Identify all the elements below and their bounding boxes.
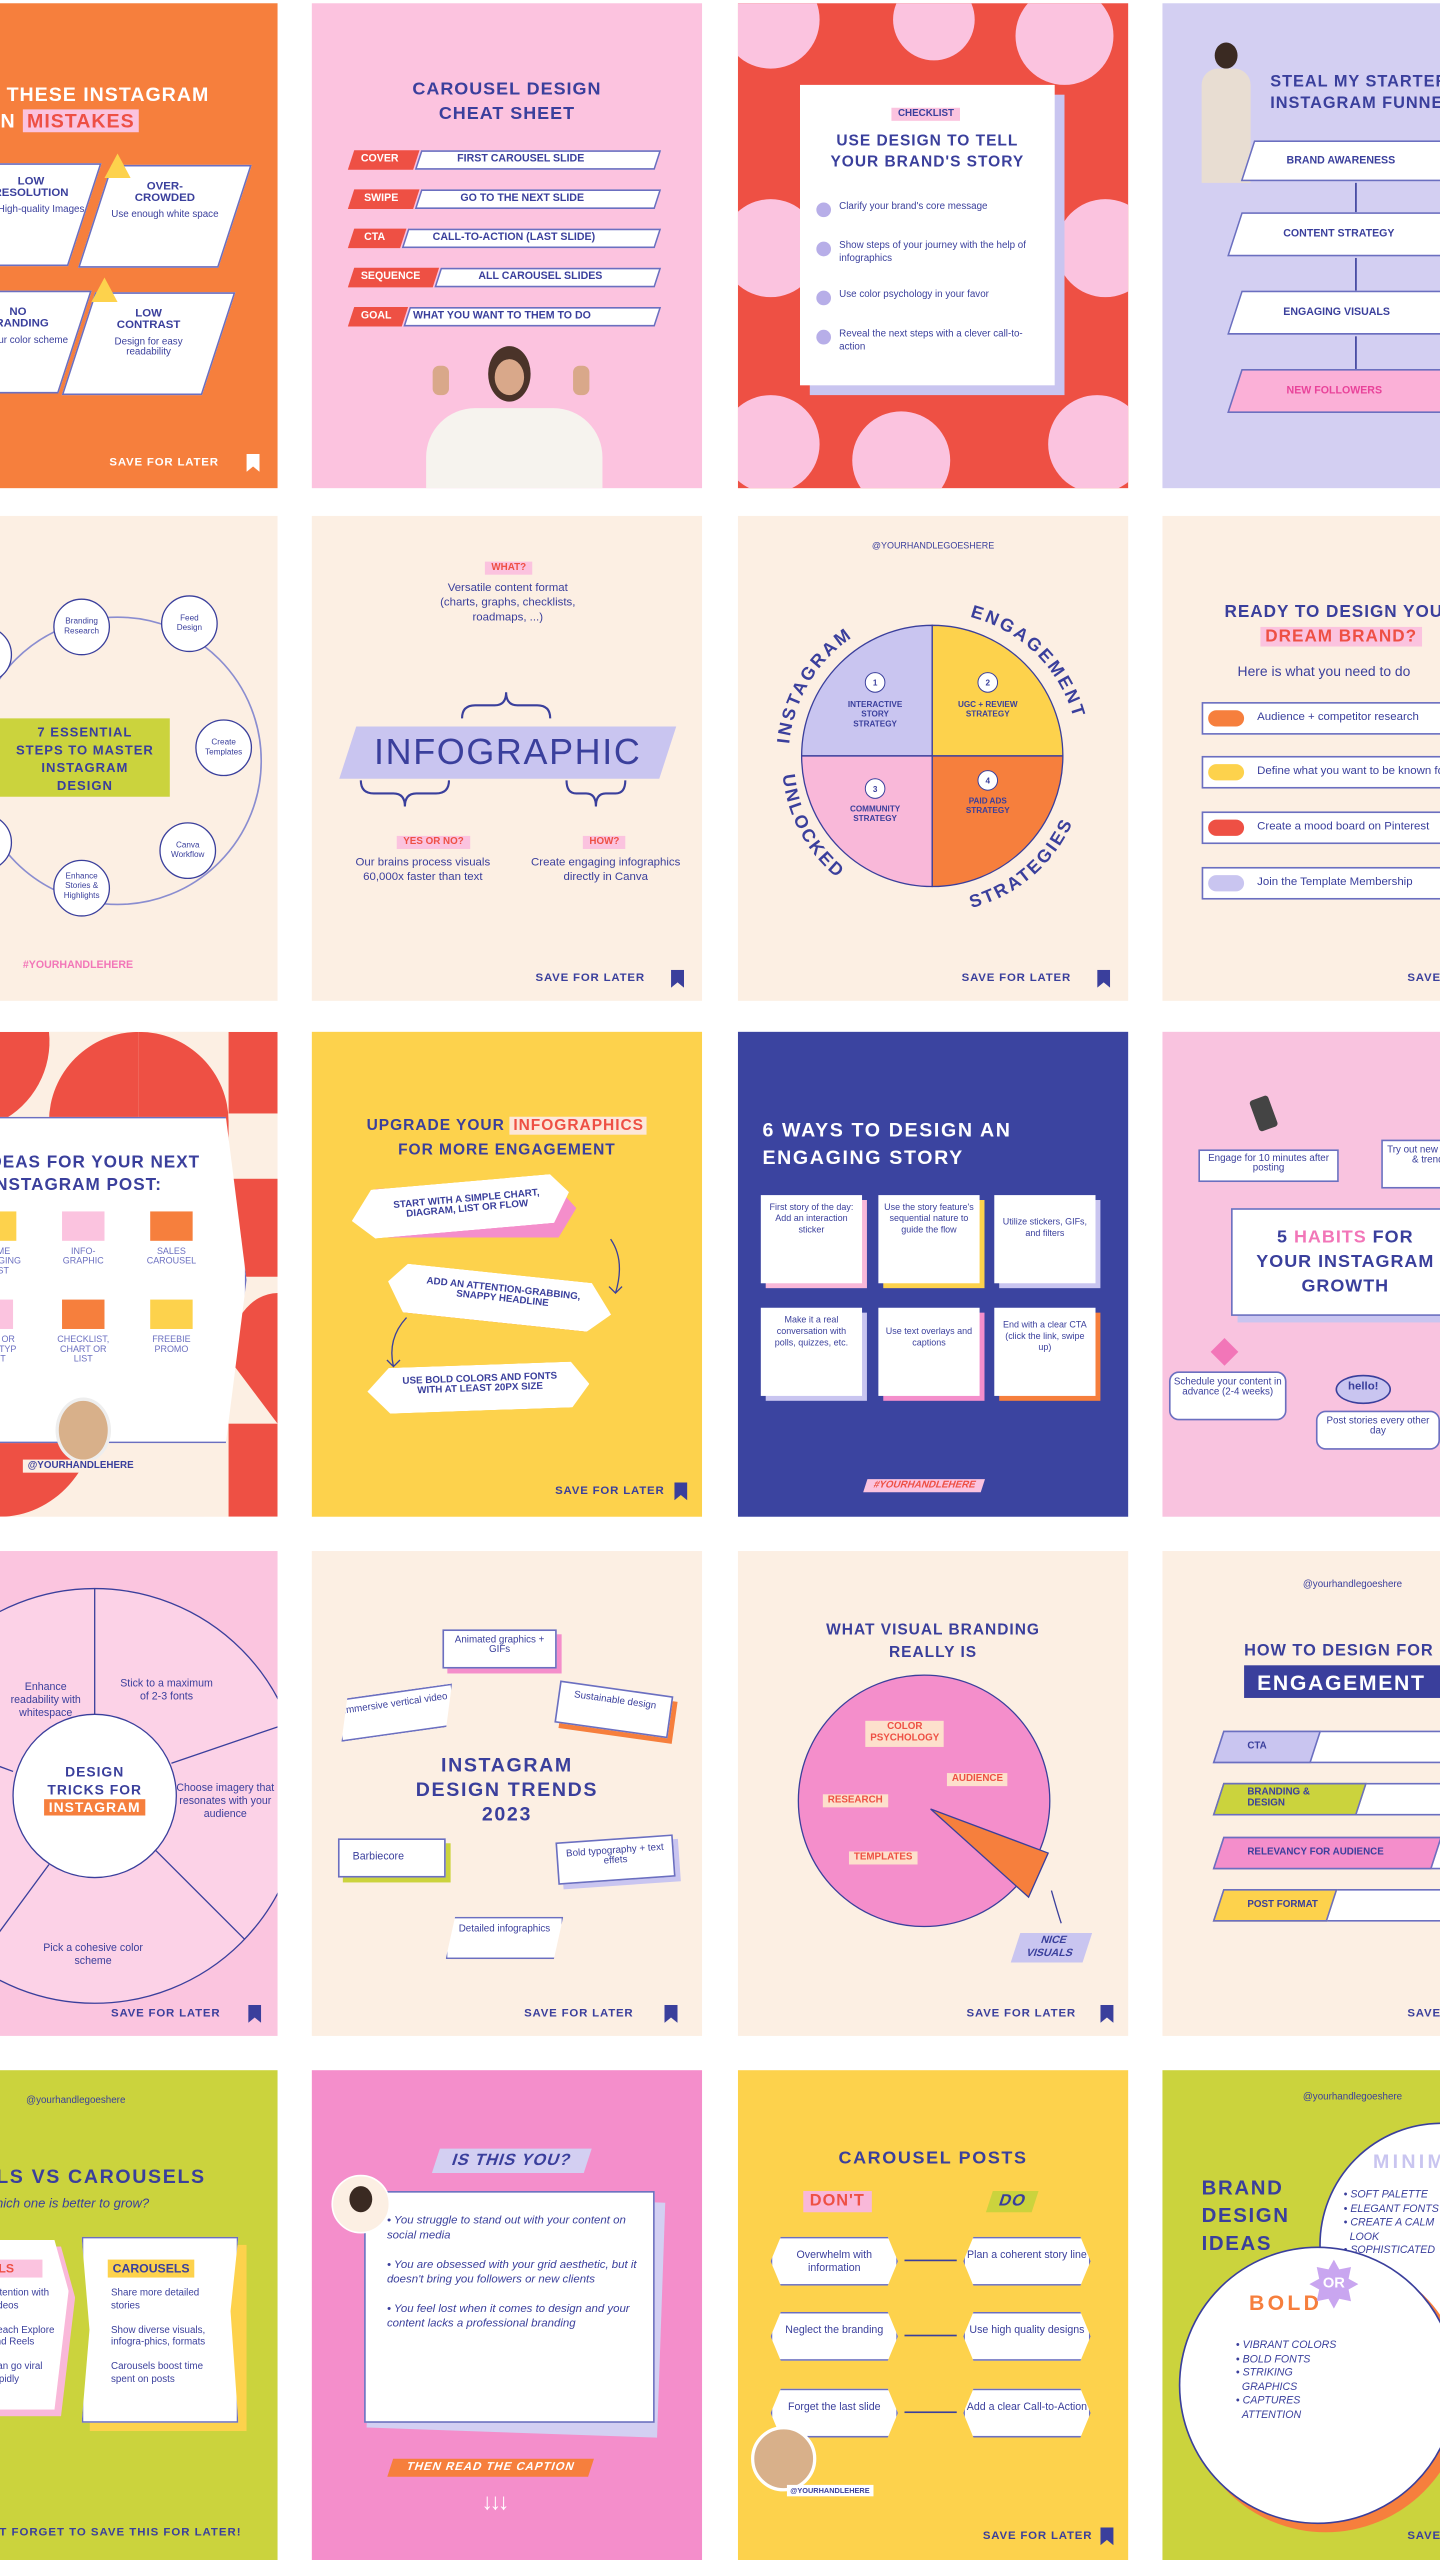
title: 6 WAYS TO DESIGN AN	[762, 1118, 1012, 1141]
handle: @yourhandlegoeshere	[1303, 1580, 1402, 1590]
wheel: PAID ADS	[969, 796, 1007, 805]
center label: INSTAGRAM	[41, 761, 128, 776]
folder icons: FREEBIE	[152, 1336, 191, 1345]
todo rows: Create a mood board on Pinterest	[1257, 821, 1429, 833]
wheel: 4	[985, 777, 990, 786]
arrows: ↓↓↓	[482, 2488, 506, 2514]
habit: schedule: Schedule your content in advance (2-4 weeks)	[1174, 1378, 1282, 1398]
wheel: STORY	[861, 710, 889, 719]
card: reels	[0, 2240, 75, 2416]
handle tag: @YOURHANDLEHERE	[28, 1461, 134, 1471]
title	[412, 80, 601, 124]
text: yes or no: Our brains process visuals 60,000x faster than text	[356, 857, 490, 883]
icon: bookmark	[1100, 2005, 1113, 2023]
tile 17: reels vs carousels	[0, 2070, 278, 2560]
tag: what	[485, 562, 533, 575]
title: DESIGN	[1202, 2204, 1290, 2227]
bullets	[387, 2216, 637, 2330]
tile 15: visual branding	[738, 1551, 1128, 2036]
cycle diagram: Canva	[176, 840, 200, 849]
cheat rows: SEQUENCE	[361, 271, 420, 282]
card: overcrowded: CROWDED	[135, 193, 195, 204]
wheel: STRATEGY	[966, 710, 1010, 719]
title: HOW TO DESIGN FOR	[1244, 1642, 1434, 1660]
funnel steps	[1227, 140, 1440, 413]
icon: hello bubble	[1336, 1375, 1391, 1404]
wheel: STRATEGIES	[970, 820, 1071, 907]
handle tag: #YOURHANDLEHERE	[872, 1481, 977, 1491]
cycle diagram: Feed	[180, 613, 199, 622]
cheat rows: ALL CAROUSEL SLIDES	[478, 271, 602, 282]
title: DREAM BRAND?	[1265, 627, 1417, 647]
title: 2023	[482, 1802, 532, 1825]
badge: or: OR	[1323, 2274, 1345, 2291]
circle: bold	[1179, 2247, 1440, 2524]
card: low contrast: Design for easy	[115, 338, 183, 348]
handle tag	[23, 1460, 139, 1473]
circle: minimal: • SOPHISTICATED	[1344, 2245, 1435, 2256]
cycle diagram: Branding	[65, 617, 98, 626]
card: no branding: NO	[9, 307, 27, 318]
card: carousels: CAROUSELS	[113, 2261, 190, 2276]
todo rows	[1202, 702, 1440, 900]
wheel: INTERACTIVE	[848, 700, 903, 709]
icon: hello bubble: hello!	[1348, 1381, 1378, 1393]
card: carousels: Carousels boost time spent on posts	[111, 2362, 203, 2384]
center box: YOUR INSTAGRAM	[1256, 1252, 1434, 1272]
story cards: Use the story feature's sequential nature to guide the flow	[884, 1203, 974, 1236]
bullets: • You struggle to stand out with your content on social media	[387, 2216, 626, 2242]
wheel: STRATEGY	[853, 814, 898, 823]
funnel steps: NEW FOLLOWERS	[1287, 385, 1382, 397]
folder icons: CAROUSEL	[147, 1257, 196, 1267]
folder icons: CHECKLIST,	[57, 1336, 109, 1345]
folder icons: CHART OR	[60, 1345, 107, 1355]
cheat rows: GO TO THE NEXT SLIDE	[460, 193, 584, 204]
items: Show steps of your journey with the help of infographics	[839, 242, 1026, 264]
icon: warning	[104, 153, 131, 178]
cycle diagram: Workflow	[171, 850, 205, 859]
wheel: INSTAGRAM	[777, 628, 851, 743]
bullets: • You feel lost when it comes to design and your content lacks a professional branding	[387, 2304, 630, 2330]
cycle diagram: Design	[177, 623, 202, 632]
handle: #YOURHANDLEHERE	[23, 960, 133, 971]
text: what: roadmaps, ...)	[472, 612, 543, 624]
tile 14: trends 2023	[312, 1551, 702, 2036]
handle	[787, 2485, 873, 2496]
tile 13: design tricks pie: Pick a cohesive color scheme	[43, 1943, 143, 1967]
bars: POST FORMAT	[1247, 1900, 1318, 1910]
tile 2: carousel cheat sheet	[312, 3, 702, 488]
photo: avatar	[751, 2426, 816, 2491]
story cards: Utilize stickers, GIFs, and filters	[1003, 1218, 1087, 1239]
photo: avatar	[331, 2175, 390, 2233]
photo: avatar	[56, 1398, 111, 1463]
step arrows: USE BOLD COLORS AND FONTS WITH AT LEAST 20PX SIZE	[402, 1372, 557, 1396]
center label	[0, 718, 170, 797]
wheel	[777, 605, 1086, 907]
icon: bookmark	[1100, 2527, 1113, 2545]
hex rows: Use high quality designs	[969, 2325, 1084, 2336]
card: overcrowded	[78, 164, 252, 268]
circle: bold: GRAPHICS	[1242, 2381, 1297, 2393]
hex rows: Overwhelm with information	[797, 2250, 872, 2274]
handle: @yourhandlegoeshere	[26, 2096, 125, 2106]
tag: yes or no	[397, 836, 470, 849]
save: SAVE FOR LATER	[111, 2008, 220, 2020]
card: overcrowded: Use enough white space	[111, 211, 219, 220]
title	[0, 83, 209, 132]
center box: 5 HABITS FOR	[1277, 1228, 1414, 1247]
save: SAVE FOR LATER	[524, 2008, 634, 2020]
wheel: STRATEGY	[966, 806, 1010, 815]
cycle diagram: Enhance	[66, 871, 98, 880]
tile 9: ideas for next post	[0, 1032, 278, 1517]
story cards: Use text overlays and captions	[886, 1327, 972, 1349]
center label: DESIGN	[57, 779, 113, 793]
title	[1270, 73, 1440, 113]
bars: CTA	[1247, 1742, 1267, 1752]
tag: nice visuals	[1011, 1933, 1092, 1962]
tile 12: 5 habits	[1162, 1032, 1440, 1517]
story cards: End with a clear CTA (click the link, swipe up)	[1003, 1321, 1087, 1353]
center title	[44, 1763, 146, 1816]
handle: @yourhandlegoeshere	[1303, 2093, 1402, 2103]
bars: DESIGN	[1247, 1799, 1285, 1809]
tile 10: upgrade infographics	[312, 1032, 702, 1517]
subtitle: Here is what you need to do	[1238, 663, 1410, 679]
title	[367, 1116, 647, 1159]
tile 15: visual branding: TEMPLATES	[854, 1853, 912, 1863]
items: Use color psychology in your favor	[839, 291, 989, 300]
tag: how	[583, 836, 626, 849]
circle: bold: • VIBRANT COLORS	[1236, 2340, 1336, 2351]
card title: USE DESIGN TO TELL	[836, 132, 1018, 150]
tile 1: avoid mistakes	[0, 3, 278, 488]
tile 3: checklist brand story	[738, 3, 1128, 488]
save: SAVE FOR LATER	[983, 2531, 1092, 2542]
card: carousels: Show diverse visuals, infogra-phics, formats	[111, 2326, 205, 2348]
tile 6: infographic	[312, 516, 702, 1001]
handle: @YOURHANDLEHERE	[790, 2487, 870, 2495]
card: no branding	[0, 290, 92, 394]
center box: GROWTH	[1301, 1277, 1389, 1296]
title: WHAT VISUAL BRANDING	[826, 1621, 1040, 1639]
card: low contrast	[62, 292, 236, 396]
title: BRAND	[1202, 2176, 1283, 2199]
tag: CHECKLIST	[898, 109, 954, 119]
tag	[891, 108, 961, 121]
card: carousels: Share more detailed stories	[111, 2289, 199, 2311]
tag: what: WHAT?	[491, 563, 526, 573]
wheel: 2	[985, 679, 990, 688]
tile 14: trends 2023: Barbiecore	[353, 1851, 404, 1863]
braces	[360, 692, 626, 806]
icon: bookmark	[247, 454, 260, 472]
title	[416, 1753, 598, 1825]
card: overcrowded: OVER-	[147, 181, 183, 193]
funnel steps: CONTENT STRATEGY	[1283, 229, 1395, 240]
tile 4: funnel	[1162, 3, 1440, 488]
wheel: ENGAGEMENT	[971, 605, 1086, 714]
bars	[1212, 1730, 1440, 1922]
tag: is this you: IS THIS YOU?	[449, 2152, 574, 2170]
circle: bold: BOLD	[1249, 2291, 1322, 2315]
center label: STEPS TO MASTER	[16, 743, 154, 758]
background pattern	[738, 3, 1128, 488]
tile 19: do and dont	[738, 2070, 1128, 2560]
cta tag	[387, 2459, 594, 2477]
title	[1202, 2176, 1290, 2255]
card: low contrast: LOW	[135, 309, 162, 320]
title highlight: ENGAGEMENT	[1257, 1670, 1426, 1695]
tile 15: visual branding: RESEARCH	[828, 1796, 883, 1806]
hex rows: Plan a coherent story line	[967, 2250, 1087, 2261]
tile 13: design tricks pie	[0, 1551, 278, 2036]
tile 14: trends 2023: Bold typography + text effets	[566, 1843, 664, 1867]
tag: nice visuals: NICE	[1039, 1935, 1068, 1946]
circle: minimal	[1319, 2122, 1440, 2367]
tile 16: design for engagement	[1162, 1551, 1440, 2036]
card title: YOUR BRAND'S STORY	[830, 153, 1024, 171]
story cards: First story of the day: Add an interaction sticker	[769, 1203, 853, 1236]
main word: INFOGRAPHIC	[374, 731, 641, 772]
cta tag: THEN READ THE CAPTION	[405, 2462, 576, 2473]
tile 14: trends 2023: Detailed infographics	[459, 1925, 550, 1935]
folder icons: GRAPHIC	[63, 1257, 104, 1267]
center box	[1231, 1208, 1440, 1316]
title: CAROUSEL POSTS	[838, 2149, 1028, 2168]
badge: or	[1309, 2260, 1358, 2309]
card	[364, 2191, 666, 2438]
hex rows: Forget the last slide	[788, 2402, 881, 2413]
icon: bookmark	[248, 2005, 261, 2023]
wheel: 3	[873, 785, 878, 794]
title	[826, 1621, 1040, 1662]
bullets: • You are obsessed with your grid aesthetic, but it doesn't bring you followers or new clients	[387, 2260, 637, 2286]
folder icons: SALES	[157, 1247, 186, 1257]
tag: dont: DON'T	[810, 2193, 865, 2211]
cheat rows: WHAT YOU WANT TO THEM TO DO	[413, 310, 591, 322]
habit: try trends	[1381, 1140, 1440, 1189]
center title: TRICKS FOR	[47, 1781, 142, 1798]
bars: BRANDING &	[1247, 1788, 1310, 1798]
wheel: 1	[873, 679, 878, 688]
center label: 7 ESSENTIAL	[37, 725, 132, 740]
icon: bookmark	[664, 2005, 678, 2023]
circle: bold: ATTENTION	[1242, 2409, 1301, 2420]
center title: INSTAGRAM	[49, 1799, 141, 1816]
cheat rows: CALL-TO-ACTION (LAST SLIDE)	[433, 232, 595, 243]
wheel: COMMUNITY	[850, 804, 901, 813]
tag: dont	[803, 2191, 871, 2212]
title: IDEAS	[1202, 2232, 1272, 2255]
cheat rows: GOAL	[361, 310, 391, 322]
items: Clarify your brand's core message	[839, 202, 988, 212]
cycle diagram: Templates	[205, 747, 242, 756]
circle: bold: • STRIKING	[1236, 2367, 1293, 2379]
tag: do	[986, 2191, 1039, 2212]
habit: schedule	[1169, 1371, 1287, 1420]
tile 8: ready to design	[1162, 516, 1440, 1001]
step arrows: ADD AN ATTENTION-GRABBING, SNAPPY HEADLINE	[426, 1277, 581, 1309]
tag: is this you	[432, 2149, 591, 2173]
story cards: Make it a real conversation with polls, quizzes, etc.	[775, 1316, 848, 1349]
pie visual	[798, 1674, 1062, 1928]
tag: yes or no: YES OR NO?	[403, 838, 464, 847]
card title	[0, 1153, 200, 1195]
title	[1224, 602, 1440, 647]
segment texts: Enhance readability with whitespace	[11, 1682, 81, 1719]
labels: COLOR	[887, 1722, 922, 1732]
text: what: (charts, graphs, checklists,	[440, 598, 575, 609]
tag: how: HOW?	[589, 838, 619, 847]
center title: DESIGN	[65, 1763, 124, 1780]
todo rows: Audience + competitor research	[1257, 712, 1419, 723]
cycle diagram: Stories &	[65, 881, 99, 890]
story cards	[760, 1195, 1100, 1401]
hex rows: Add a clear Call-to-Action	[967, 2402, 1087, 2413]
icon: bookmark	[671, 970, 684, 988]
card: low contrast: readability	[126, 348, 171, 358]
tag: do: DO	[996, 2193, 1029, 2211]
photo: person	[426, 346, 602, 488]
arrows	[386, 1238, 622, 1368]
icon: diamond	[1211, 1338, 1238, 1366]
background pattern	[0, 1032, 278, 1517]
labels: PSYCHOLOGY	[870, 1734, 939, 1744]
save: SAVE FOR LATER	[962, 973, 1071, 984]
funnel steps: ENGAGING VISUALS	[1283, 307, 1390, 318]
card: carousels	[82, 2236, 246, 2431]
folder icons: PROMO	[154, 1345, 188, 1355]
title	[762, 1118, 1012, 1169]
habit: engage: Engage for 10 minutes after posting	[1208, 1154, 1329, 1174]
tile 5: 7 steps cycle	[0, 516, 278, 1001]
habit: post stories	[1316, 1411, 1440, 1450]
tags: Animated graphics + GIFs	[455, 1636, 544, 1656]
checklist card	[800, 84, 1064, 396]
card title	[830, 132, 1024, 171]
step arrows	[352, 1174, 611, 1414]
cheat rows: SWIPE	[364, 193, 398, 204]
title: INSTAGRAM	[441, 1753, 573, 1776]
title highlight	[1244, 1665, 1440, 1698]
icon: bookmark	[1097, 970, 1110, 988]
folder icons	[0, 1211, 196, 1365]
tile 18: is this you	[312, 2070, 702, 2560]
tile 20: brand design ideas	[1162, 2070, 1440, 2560]
tile 13: design tricks pie: Stick to a maximum of 2-3 fonts	[120, 1678, 213, 1703]
items	[816, 202, 1026, 352]
title: CHEAT SHEET	[439, 104, 575, 124]
title: REALLY IS	[889, 1644, 977, 1662]
wheel: UGC + REVIEW	[958, 700, 1018, 709]
tile 14: trends 2023: Sustainable design	[573, 1691, 657, 1712]
save for later: SAVE FOR LATER	[109, 457, 219, 469]
pie chart	[0, 1588, 278, 2004]
title: CAROUSEL DESIGN	[412, 80, 601, 100]
hex rows: Neglect the branding	[785, 2325, 883, 2336]
tile 11: 6 ways story	[738, 1032, 1128, 1517]
tags	[442, 1629, 557, 1669]
circle: minimal: LOOK	[1350, 2231, 1379, 2242]
circle: bold: • BOLD FONTS	[1236, 2353, 1310, 2365]
folder icons: INFO-	[71, 1247, 95, 1257]
card: low resolution	[0, 163, 102, 266]
save: SAVE FOR LATER	[967, 2008, 1076, 2020]
tile 14: trends 2023: Immersive vertical video	[343, 1692, 448, 1717]
title: DESIGN TRENDS	[416, 1778, 598, 1801]
tile 7: engagement wheel	[738, 516, 1128, 1001]
card: low contrast: CONTRAST	[117, 320, 180, 331]
title: FOR MORE ENGAGEMENT	[398, 1141, 616, 1159]
save: SAVE FOR LATER	[536, 973, 645, 984]
folder icons: LIST	[74, 1355, 93, 1365]
tag: nice visuals: VISUALS	[1025, 1948, 1074, 1959]
cheat rows	[348, 150, 662, 326]
post ideas card	[0, 1117, 247, 1443]
handle tag	[863, 1479, 986, 1492]
cheat rows: COVER	[361, 153, 399, 165]
cheat rows: FIRST CAROUSEL SLIDE	[457, 153, 584, 165]
cycle diagram: Highlights	[64, 891, 100, 900]
habit: post stories: Post stories every other day	[1327, 1417, 1429, 1437]
title: UPGRADE YOUR INFOGRAPHICS	[367, 1117, 644, 1135]
hex rows	[770, 2236, 1090, 2438]
circle: minimal: • ELEGANT FONTS	[1344, 2203, 1439, 2215]
icon: warning 2	[91, 278, 118, 302]
todo rows: Join the Template Membership	[1257, 877, 1413, 888]
circle: bold: • CAPTURES	[1236, 2395, 1300, 2407]
save: SAVE FOR LATER	[555, 1486, 665, 1497]
tile 15: visual branding: AUDIENCE	[952, 1775, 1003, 1784]
habit: engage	[1198, 1149, 1339, 1182]
bars: RELEVANCY FOR AUDIENCE	[1247, 1848, 1384, 1858]
cheat rows: CTA	[364, 232, 385, 243]
funnel steps: BRAND AWARENESS	[1287, 155, 1395, 167]
step arrows: START WITH A SIMPLE CHART, DIAGRAM, LIST OR FLOW	[393, 1189, 540, 1220]
cycle diagram	[0, 595, 262, 917]
title: ENGAGING STORY	[762, 1146, 964, 1169]
circle: minimal: • SOFT PALETTE	[1344, 2189, 1428, 2201]
circle: minimal: • CREATE A CALM	[1344, 2217, 1434, 2229]
card: low resolution: LOW	[18, 176, 44, 188]
tile 13: design tricks pie: Choose imagery that resonates with your audience	[176, 1783, 274, 1820]
text: what: Versatile content format	[448, 583, 568, 594]
icon: phone hand	[1249, 1095, 1278, 1132]
cycle diagram: Create	[211, 737, 236, 746]
main word	[339, 726, 676, 779]
text: how: Create engaging infographics directly in Canva	[531, 857, 680, 883]
wheel: UNLOCKED	[783, 774, 842, 875]
wheel: STRATEGY	[853, 720, 898, 729]
photo: person	[1202, 42, 1250, 183]
cycle diagram: Research	[64, 626, 99, 635]
icon: bookmark	[674, 1482, 687, 1500]
labels	[865, 1721, 944, 1747]
items: Reveal the next steps with a clever call-to-action	[839, 330, 1023, 352]
text: what	[440, 583, 575, 624]
handle: @YOURHANDLEGOESHERE	[872, 542, 994, 552]
